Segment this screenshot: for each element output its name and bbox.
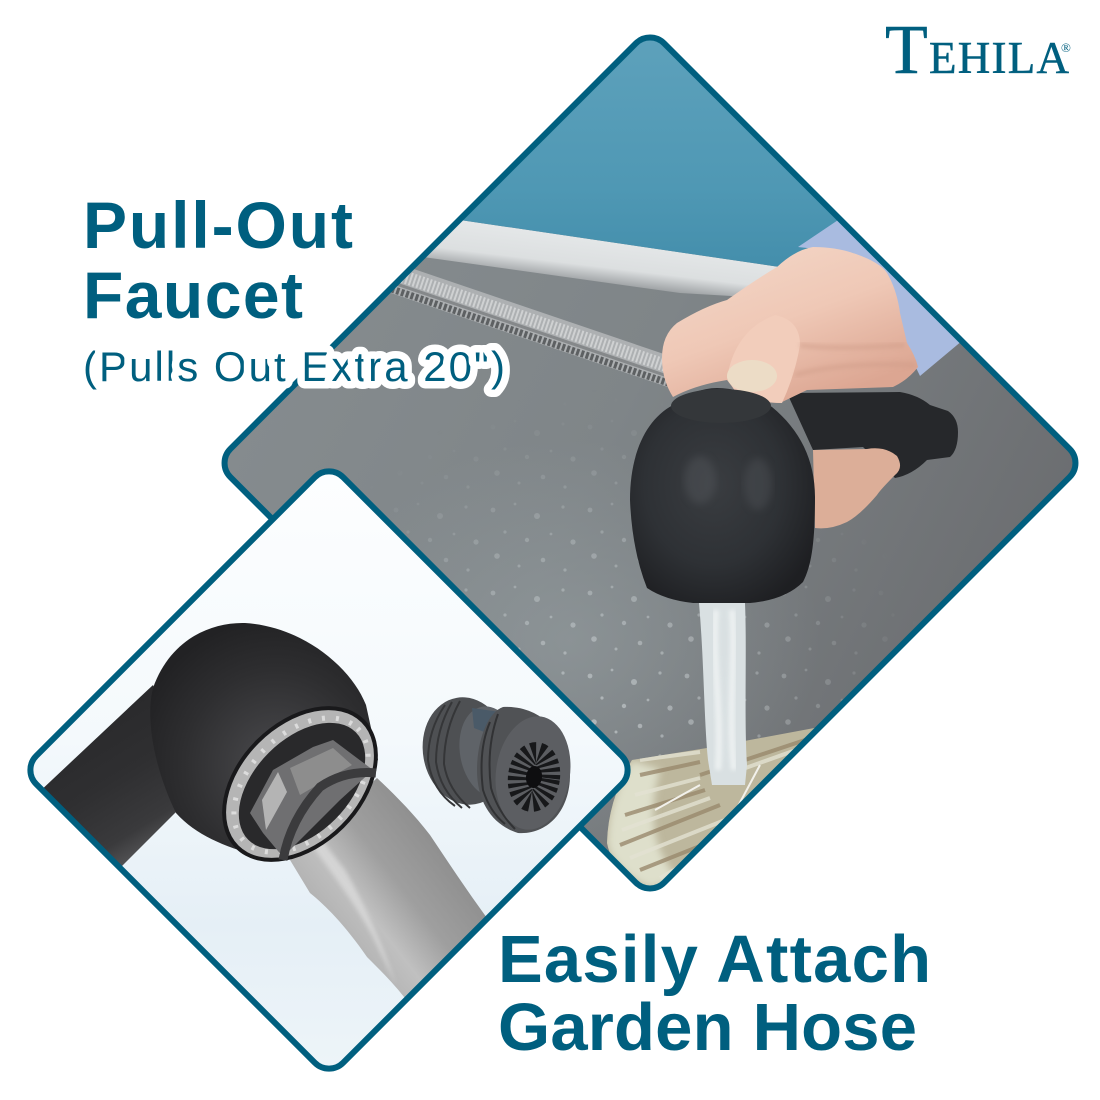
sleeve <box>798 220 960 376</box>
mounting ring <box>222 706 378 862</box>
heading: easily attach garden hose: Easily Attach <box>498 922 931 997</box>
face <box>496 716 570 830</box>
head highlights <box>686 458 714 502</box>
heading: pull-out faucet: Faucet <box>83 258 303 332</box>
sprayer head <box>630 388 815 603</box>
sink basin background <box>228 220 1072 852</box>
nut top facet highlight <box>290 748 352 795</box>
logo registered mark: ® <box>1061 40 1071 55</box>
panel: garden hose adapter photo <box>20 460 640 1080</box>
basin foam texture <box>607 728 814 886</box>
lower fingers <box>813 448 900 528</box>
faucet elbow arm <box>44 685 176 866</box>
aerator adapter <box>422 697 570 834</box>
tube highlight streak <box>315 844 390 972</box>
heading: pull-out faucet: Pull-Out <box>83 188 353 262</box>
water droplets <box>406 448 883 756</box>
teal wall <box>463 40 837 267</box>
thumbnail <box>727 360 777 392</box>
subheading with white halo: (Pulls Out Extra 20") <box>83 343 505 390</box>
panel border: large diamond <box>216 29 1084 897</box>
sprayer handle <box>787 392 958 478</box>
water stream <box>699 603 747 785</box>
spoked vents <box>516 751 552 803</box>
hand <box>662 247 918 403</box>
sink rim <box>426 220 778 296</box>
front thread body <box>477 707 570 833</box>
rear thread <box>422 697 488 805</box>
button cap <box>671 389 771 416</box>
hand crease <box>795 345 915 375</box>
faucet ball head <box>150 623 378 860</box>
heading: easily attach garden hose <box>498 922 931 1065</box>
neck <box>460 706 498 792</box>
hex nut <box>250 740 373 857</box>
nut highlights <box>262 772 287 830</box>
panel: pull-out sprayer photo <box>200 20 1100 920</box>
braided hose <box>390 269 668 387</box>
heading: pull-out faucet <box>83 188 353 332</box>
neck blue highlight <box>472 708 496 732</box>
center hole <box>526 766 542 788</box>
panel border: small diamond <box>22 463 636 1077</box>
water stream highlights <box>715 610 734 770</box>
collar <box>283 773 376 860</box>
logo: Tehila: TEHILA <box>885 12 1070 89</box>
gray hose tube <box>290 778 490 1002</box>
light photo backdrop <box>20 460 640 1080</box>
spray mist <box>470 544 704 748</box>
heading: easily attach garden hose: Garden Hose <box>498 990 917 1065</box>
thumb <box>728 324 800 403</box>
